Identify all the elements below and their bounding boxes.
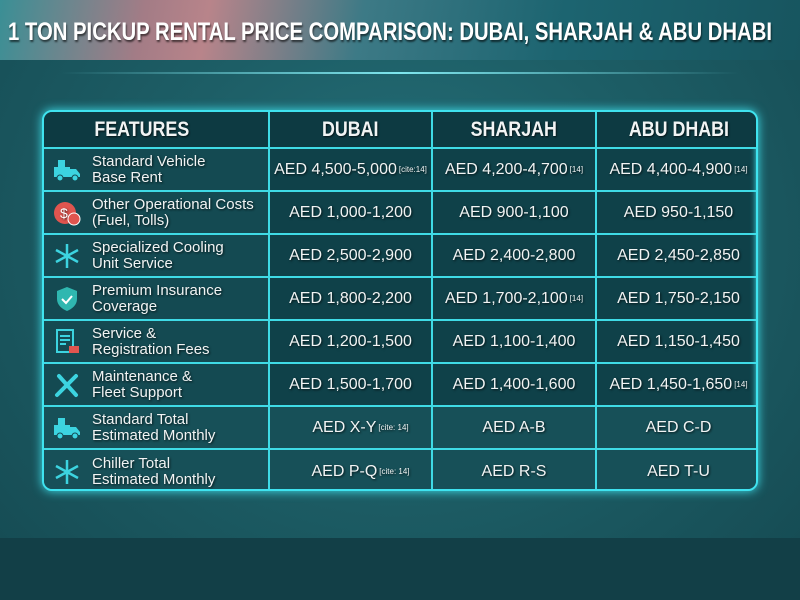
table: [14]: [570, 294, 583, 303]
row 2 label: $: [60, 204, 68, 220]
table: AED 1,200-1,500: [289, 332, 412, 350]
table: AED 4,400-4,900: [609, 160, 732, 178]
table: AED 1,100-1,400: [453, 332, 575, 350]
row 2 label: Other Operational Costs: [92, 196, 254, 212]
row 2 label: [44, 192, 270, 235]
row 7 label: Estimated Monthly: [92, 426, 215, 444]
row 3 label: [44, 235, 270, 278]
table: AED C-D: [646, 418, 711, 436]
table: AED R-S: [482, 462, 546, 480]
row 4 label: Premium Insurance: [92, 282, 222, 298]
row 2 label: (Fuel, Tolls): [92, 212, 169, 228]
table: [cite: 14]: [378, 423, 409, 432]
table: AED 2,450-2,850: [617, 246, 740, 264]
table: AED 1,500-1,700: [289, 376, 412, 392]
table: AED 2,400-2,800: [453, 246, 575, 264]
header: abu dhabi: [597, 112, 760, 149]
header: features: [44, 112, 270, 149]
table: AED 1,400-1,600: [453, 376, 575, 392]
row 8 label: [44, 450, 270, 493]
row 5 label: Service &: [92, 324, 156, 342]
table: AED 1,450-1,650: [609, 376, 732, 392]
row 8 label: Estimated Monthly: [92, 470, 215, 488]
row 7 label: [44, 407, 270, 450]
header: sharjah: [433, 112, 597, 149]
row 1 label: [44, 149, 270, 192]
table: AED 1,700-2,100: [445, 290, 568, 306]
table: AED 4,500-5,000: [274, 160, 397, 178]
table: [14]: [570, 165, 583, 174]
header: abu dhabi: ABU DHABI: [628, 118, 729, 140]
table: [14]: [734, 165, 748, 174]
table: AED 1,150-1,450: [617, 332, 740, 350]
table: AED 1,750-2,150: [617, 290, 740, 306]
table: AED T-U: [647, 462, 710, 480]
table: [cite:14]: [399, 165, 427, 174]
row 6 label: [44, 364, 270, 407]
table: AED P-Q: [311, 462, 377, 480]
table: AED X-Y: [312, 418, 376, 436]
table: [42, 110, 758, 491]
row 3 label: Specialized Cooling: [92, 238, 224, 256]
row 1 label: Base Rent: [92, 168, 162, 186]
header: dubai: [270, 112, 433, 149]
row 3 label: Unit Service: [92, 254, 173, 272]
table: AED 2,500-2,900: [289, 246, 412, 264]
row 6 label: Maintenance &: [92, 368, 192, 384]
table: AED 1,000-1,200: [289, 204, 412, 220]
row 5 label: Registration Fees: [92, 340, 210, 358]
header: dubai: DUBAI: [322, 118, 379, 140]
row 1 label: Standard Vehicle: [92, 152, 205, 170]
banner: [0, 0, 800, 60]
table: AED 1,800-2,200: [289, 290, 412, 306]
table: AED 900-1,100: [459, 204, 569, 220]
header: features: FEATURES: [94, 118, 189, 140]
table: [cite: 14]: [379, 467, 410, 476]
header: sharjah: SHARJAH: [471, 118, 557, 140]
table: AED 4,200-4,700: [445, 160, 568, 178]
table: AED 950-1,150: [624, 204, 733, 220]
row 7 label: Standard Total: [92, 410, 188, 428]
row 8 label: Chiller Total: [92, 454, 170, 472]
row 5 label: [44, 321, 270, 364]
row 4 label: [44, 278, 270, 321]
row 4 label: Coverage: [92, 298, 157, 314]
table: AED A-B: [482, 418, 546, 436]
table: [14]: [734, 380, 748, 389]
row 6 label: Fleet Support: [92, 384, 182, 400]
